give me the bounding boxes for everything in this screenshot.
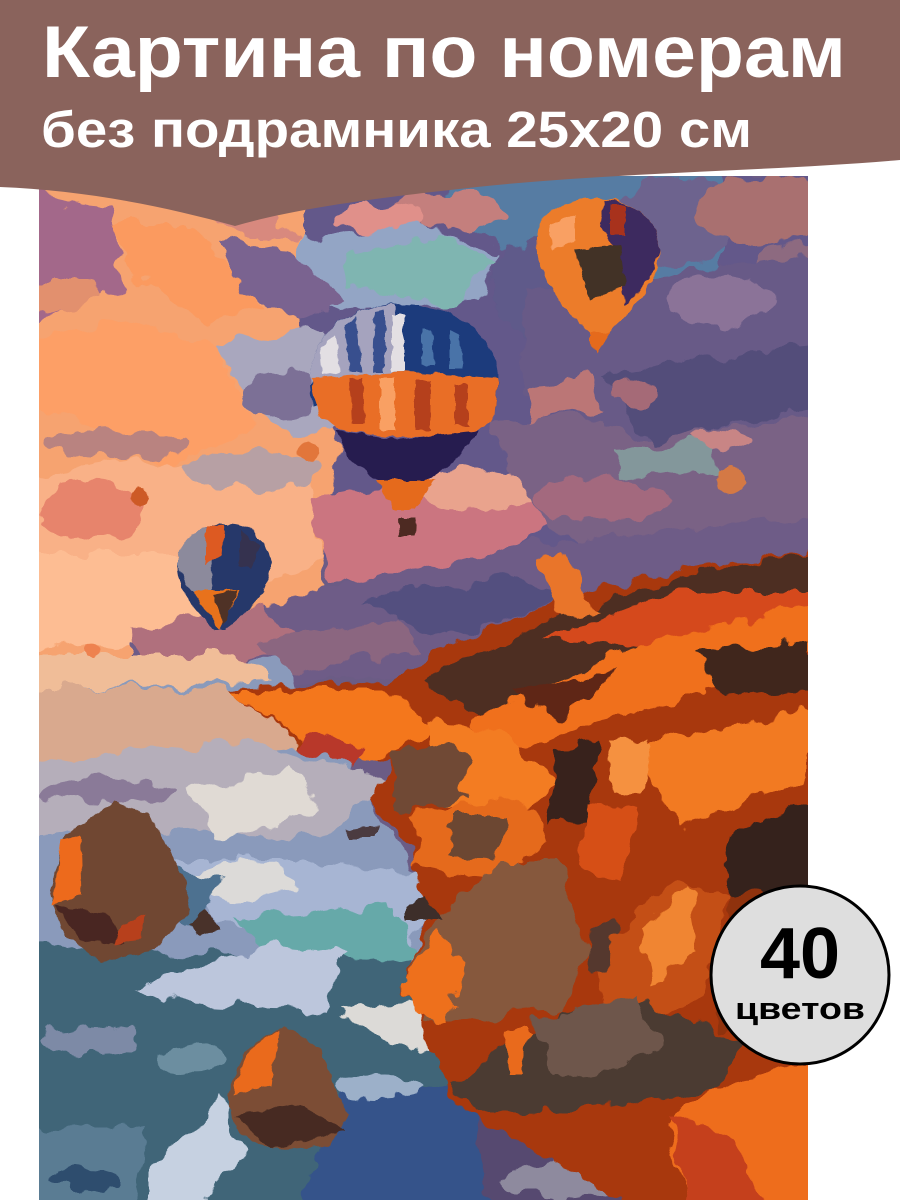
painting: balloons over a rocky coast [39,176,808,1200]
header banner [0,0,900,226]
sky background [39,176,808,676]
large balloon [310,304,498,536]
rocks in the sea [50,802,442,1150]
badge label: цветов [735,991,865,1026]
small distant balloons [85,442,745,657]
badge: 40 colours [711,886,889,1064]
badge number: 40 [760,914,840,994]
title: Картина по номерам [42,12,846,93]
cliffs [228,540,850,1200]
left balloon [177,524,271,630]
subtitle: без подрамника 25х20 см [41,101,752,158]
sea [20,655,670,1200]
upper right balloon [536,198,660,353]
